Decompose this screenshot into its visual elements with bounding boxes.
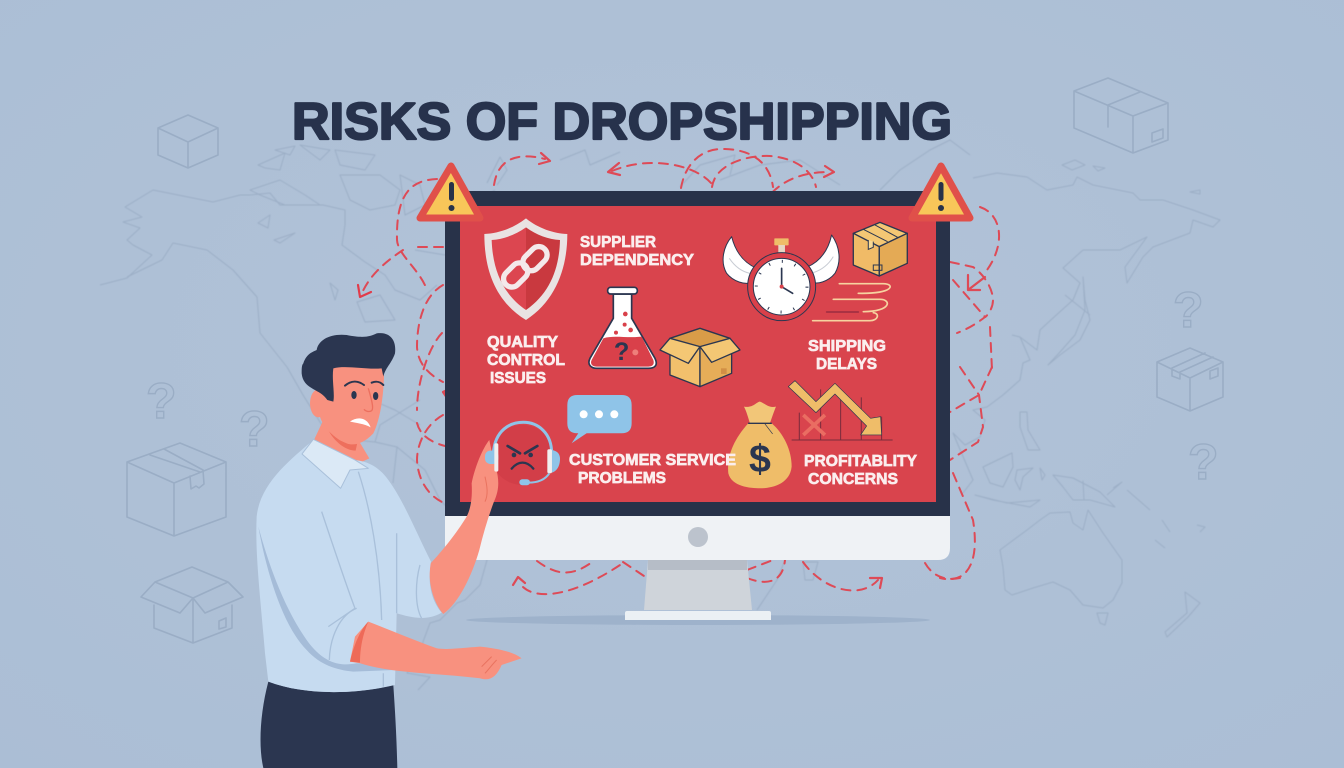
- warning sign left: [420, 166, 480, 218]
- label: profitability concerns: CONCERNS: [808, 471, 898, 488]
- dashed shipping routes: [358, 149, 999, 594]
- monitor chin: [445, 510, 950, 560]
- label: shipping delays: [808, 338, 886, 373]
- label: supplier dependency: DEPENDENCY: [580, 252, 694, 269]
- icon: money bag: [728, 402, 792, 488]
- collar: [302, 439, 368, 488]
- icon: closed cardboard box: [853, 222, 907, 276]
- icon: money bag: $: [749, 437, 771, 481]
- label: supplier dependency: [580, 234, 694, 269]
- shirt shadow: [258, 527, 396, 672]
- icon: headset ear cup over hand: [485, 443, 498, 472]
- label: profitability concerns: [804, 453, 917, 488]
- raised arm and hand: [430, 440, 498, 614]
- icon: winged stopwatch: [723, 235, 839, 321]
- neck: [314, 420, 369, 465]
- label: shipping delays: SHIPPING: [808, 338, 886, 355]
- monitor stand shadow: [466, 615, 930, 625]
- monitor bezel: [445, 191, 950, 516]
- icon: ghost box left: [127, 443, 226, 536]
- icon: speech bubble: [567, 395, 632, 443]
- label: quality control issues: QUALITY: [487, 334, 558, 351]
- warning sign right: [912, 166, 970, 218]
- icon: open cardboard box: [660, 328, 740, 387]
- icon: ghost question mark 3: ?: [1173, 282, 1204, 338]
- icon: shield with broken chain: [484, 218, 567, 320]
- monitor stand: [625, 560, 771, 620]
- icon: angry customer with headset: [491, 422, 560, 485]
- ear: [310, 389, 327, 417]
- icon: ghost question mark 1: ?: [146, 373, 177, 429]
- label: quality control issues: ISSUES: [490, 370, 546, 387]
- label: customer service problems: CUSTOMER SERVICE: [569, 452, 736, 469]
- neck shadow: [326, 425, 357, 451]
- finger creases: [482, 657, 497, 673]
- label: quality control issues: CONTROL: [487, 352, 565, 369]
- monitor: [445, 191, 950, 625]
- label: customer service problems: PROBLEMS: [578, 470, 666, 487]
- icon: ghost box top right: [1074, 78, 1168, 153]
- icon: falling profit chart: [788, 381, 893, 440]
- label: quality control issues: [487, 334, 565, 387]
- icon: ghost box right: [1157, 348, 1223, 411]
- facial features: [345, 382, 383, 427]
- label: customer service problems: [569, 452, 736, 487]
- hand creases: [485, 477, 487, 502]
- hair: [302, 333, 395, 402]
- label: shipping delays: DELAYS: [816, 356, 877, 373]
- trousers: [261, 682, 397, 768]
- shirt: [256, 440, 442, 692]
- icon: ghost question mark 2: ?: [239, 401, 270, 457]
- label: profitability concerns: PROFITABLITY: [804, 453, 917, 470]
- title: RISKS OF DROPSHIPPING: [292, 93, 952, 151]
- icon: flask with question mark: [589, 287, 656, 368]
- icon: ghost box top left: [158, 115, 218, 168]
- icon: flask with question mark: ?: [614, 338, 629, 366]
- label: supplier dependency: SUPPLIER: [580, 234, 656, 251]
- icon: ghost question mark 4: ?: [1188, 434, 1219, 490]
- screen: [460, 206, 936, 502]
- world map outline: [100, 140, 1220, 690]
- pointing forearm: [350, 622, 522, 679]
- person: worried man pointing: [256, 333, 522, 768]
- icon: ghost open box: [141, 567, 243, 643]
- shirt folds: [322, 472, 422, 687]
- icon: speed lines: [813, 284, 890, 321]
- face: [320, 360, 384, 444]
